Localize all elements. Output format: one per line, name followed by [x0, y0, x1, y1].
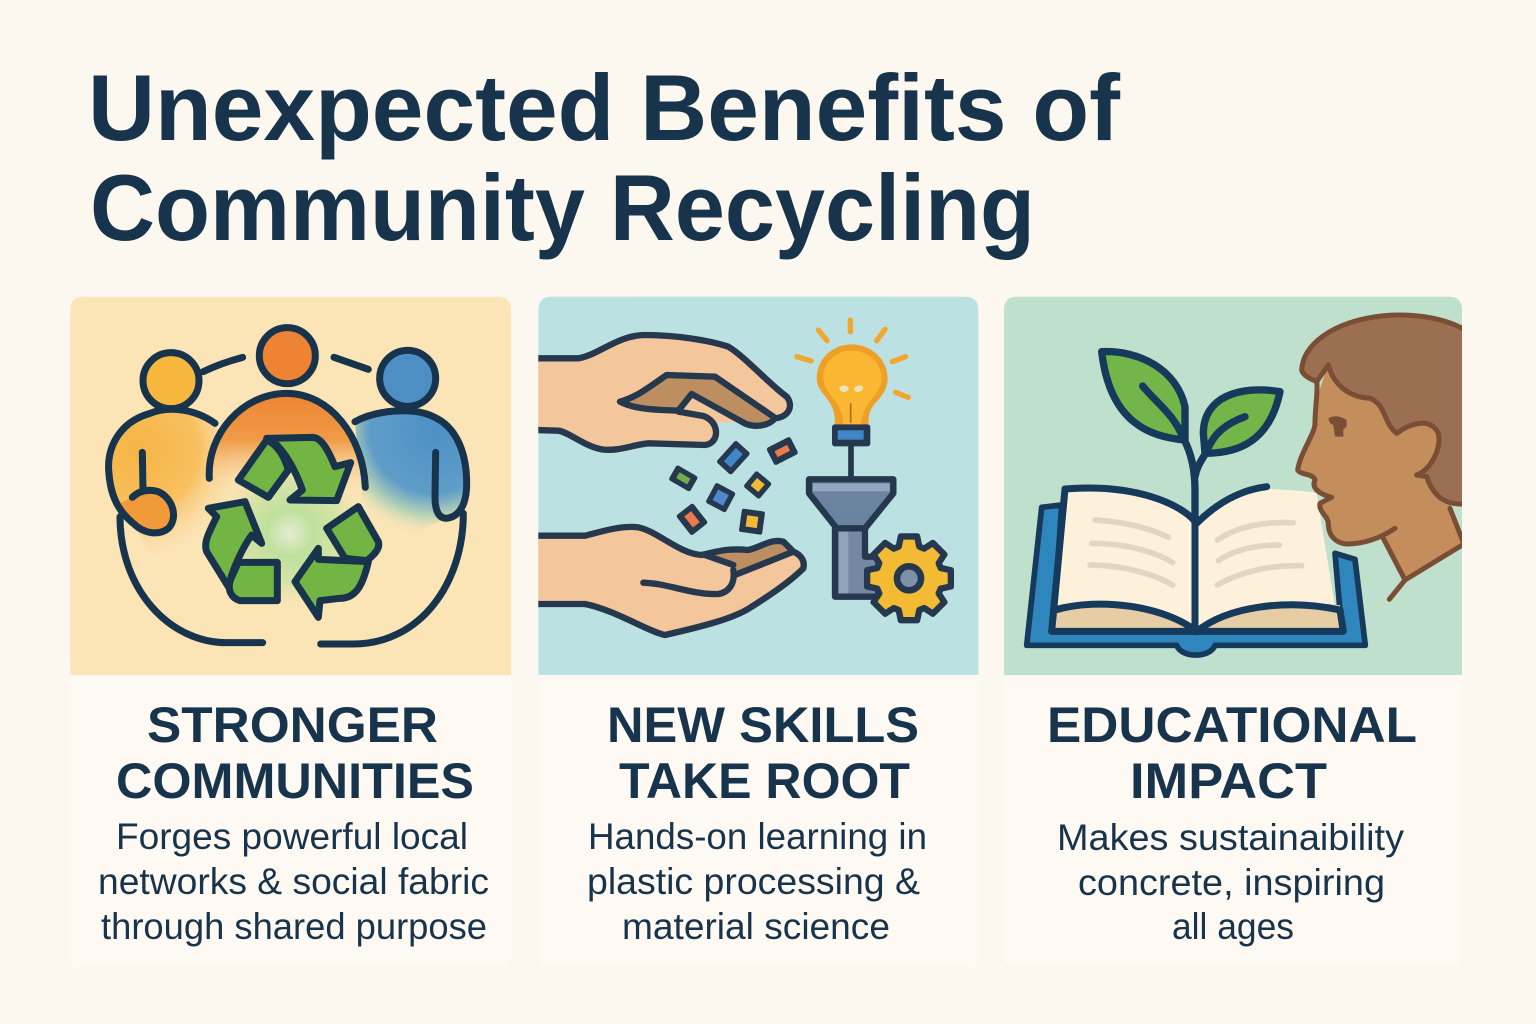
heading: educational impact [1047, 697, 1417, 809]
description: new skills: Hands-on learning in [588, 816, 927, 857]
caption card background: new skills [538, 660, 978, 967]
illustration: book, sprout and reader [1004, 297, 1467, 675]
heading: educational impact: IMPACT [1130, 753, 1327, 809]
description: educational impact [1057, 817, 1405, 947]
illustration: hands, plastic pieces and machine [535, 297, 978, 675]
title [88, 55, 1121, 260]
people connecting lines [120, 357, 463, 644]
description: educational impact: all ages [1172, 906, 1294, 947]
caption card background: stronger communities [70, 660, 511, 967]
heading: new skills: TAKE ROOT [619, 753, 910, 809]
description: stronger communities [98, 816, 489, 947]
heading: stronger communities: STRONGER [147, 697, 438, 753]
description: stronger communities: networks & social fabric [98, 861, 489, 902]
illustration: community and recycling [70, 297, 511, 675]
icon: open book [1027, 487, 1365, 655]
icon: reader's head [1298, 315, 1467, 599]
icon: center person [209, 328, 365, 517]
heading: new skills [607, 697, 919, 809]
description: new skills: material science [622, 906, 890, 947]
panel: educational impact [1004, 297, 1467, 967]
title: Unexpected Benefits of [88, 55, 1121, 160]
description: stronger communities: Forges powerful local [116, 816, 468, 857]
description: stronger communities: through shared purpose [101, 906, 487, 947]
caption card background: educational impact [1004, 660, 1462, 967]
icon: recycling symbol [206, 437, 379, 617]
description: new skills [587, 816, 927, 947]
heading: stronger communities [116, 697, 474, 809]
icon: funnel machine [809, 479, 893, 597]
heading: stronger communities: COMMUNITIES [116, 753, 474, 809]
icon: left person [109, 353, 237, 563]
description: educational impact: Makes sustainaibility [1057, 817, 1405, 858]
icon: plastic pieces [668, 436, 799, 536]
icon: sprout [1102, 352, 1280, 523]
icon: gear [867, 536, 951, 620]
panel: stronger communities [70, 297, 511, 967]
icon: upper hand [535, 335, 790, 450]
icon: right person [355, 350, 467, 537]
description: educational impact: concrete, inspiring [1078, 862, 1385, 903]
title: Community Recycling [90, 155, 1035, 260]
description: new skills: plastic processing & [587, 861, 920, 902]
heading: new skills: NEW SKILLS [607, 697, 919, 753]
icon: lower hand [535, 527, 804, 635]
panel: new skills [535, 297, 978, 967]
icon: light bulb [797, 320, 908, 477]
heading: educational impact: EDUCATIONAL [1047, 697, 1417, 753]
